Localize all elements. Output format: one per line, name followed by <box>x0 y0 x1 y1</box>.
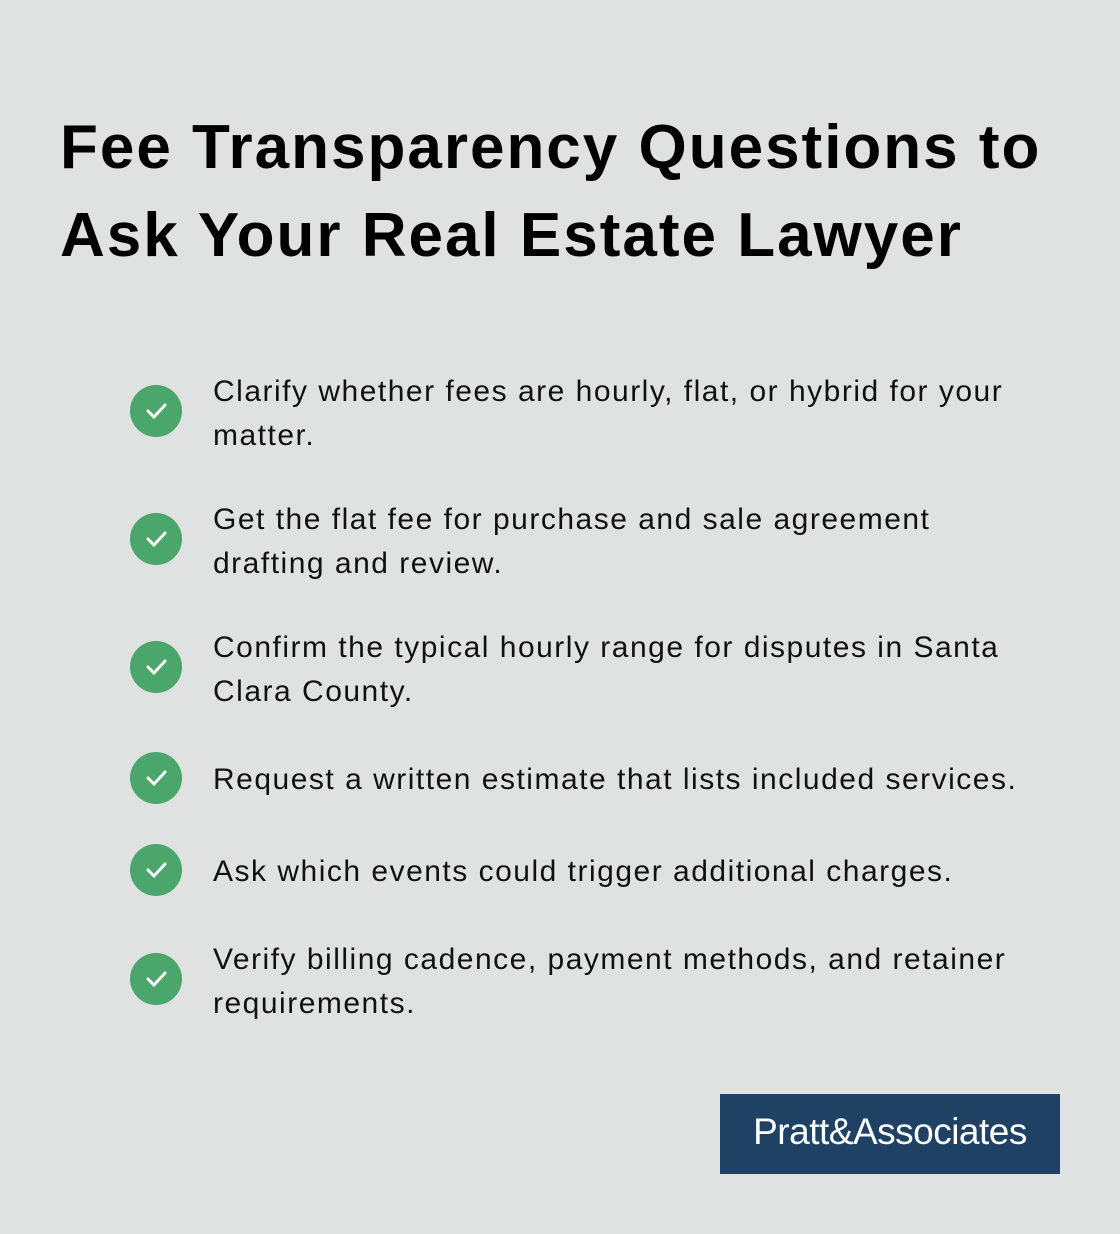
item 6 <box>130 943 1006 1020</box>
item 2 <box>130 503 930 580</box>
text: Confirm the typical hourly range for disputes in Santa Clara County. <box>213 631 999 708</box>
title: Ask Your Real Estate Lawyer <box>60 201 963 270</box>
icon: check <box>130 752 182 804</box>
icon: check <box>130 953 182 1005</box>
title <box>60 113 1041 270</box>
logo: Pratt&Associates <box>753 1111 1027 1152</box>
item 4 <box>130 752 1017 804</box>
title: Fee Transparency Questions to <box>60 113 1041 182</box>
item 3 <box>130 631 999 708</box>
icon: check <box>130 513 182 565</box>
text: Verify billing cadence, payment methods, and retainer requirements. <box>213 943 1006 1020</box>
text: Ask which events could trigger additional charges. <box>213 855 953 888</box>
icon: check <box>130 385 182 437</box>
item 1 <box>130 375 1003 452</box>
icon: check <box>130 844 182 896</box>
icon: check <box>130 641 182 693</box>
logo <box>720 1094 1060 1174</box>
text: Clarify whether fees are hourly, flat, or hybrid for your matter. <box>213 375 1003 452</box>
text: Request a written estimate that lists included services. <box>213 763 1017 796</box>
item 5 <box>130 844 953 896</box>
text: Get the flat fee for purchase and sale agreement drafting and review. <box>213 503 930 580</box>
